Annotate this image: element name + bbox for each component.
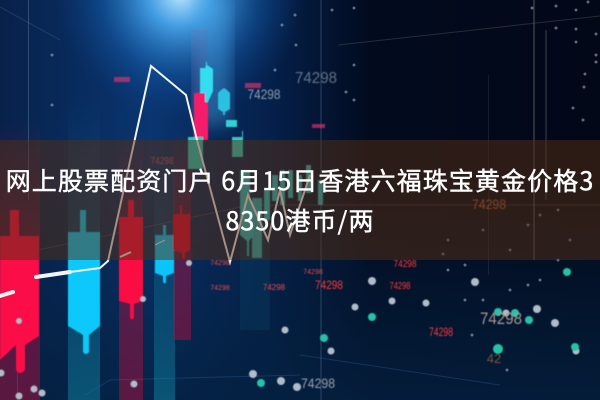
title band xyxy=(0,140,600,260)
candlestick: teal under band xyxy=(188,137,203,169)
candlestick: pink xyxy=(194,93,208,140)
candlestick: red 2 xyxy=(119,200,143,320)
number labels: 74298 xyxy=(248,86,281,102)
white price line xyxy=(0,66,310,296)
candlestick: cyan xyxy=(68,210,100,354)
number labels: 74298 xyxy=(394,259,417,270)
number labels: 74298 xyxy=(150,156,174,167)
candlestick: cyan top xyxy=(200,62,213,102)
title xyxy=(6,162,594,238)
number labels: 74298 xyxy=(429,325,453,339)
number labels: 74298 xyxy=(301,375,335,391)
number labels: 74298 xyxy=(295,70,337,87)
number labels: 74298 xyxy=(263,283,286,292)
candlestick: cyan lozenge xyxy=(218,88,230,115)
number labels: 74298 xyxy=(390,281,411,292)
number labels: 42 xyxy=(487,351,501,366)
number labels: 74298 xyxy=(210,260,230,267)
candlestick: cyan small xyxy=(155,225,174,284)
title: 网上股票配资门户 6月15日香港六福珠宝黄金价格3 xyxy=(6,162,594,198)
number labels: 74298 xyxy=(315,278,343,292)
candlestick: teal right xyxy=(232,131,243,157)
number labels: 74298 xyxy=(303,269,323,276)
title: 8350港币/两 xyxy=(225,202,375,238)
number labels: 74298 xyxy=(210,285,230,292)
candlestick: large red left xyxy=(0,210,39,373)
number labels xyxy=(150,70,522,391)
candlestick cluster: teal xyxy=(240,165,323,258)
candlestick: red top xyxy=(173,205,190,259)
candlesticks xyxy=(0,62,323,373)
glowing dots xyxy=(0,260,580,400)
number labels: 74298 xyxy=(480,309,522,328)
number labels: 74298 xyxy=(472,196,506,212)
candlestick: mini cyan xyxy=(226,120,237,127)
pink tags xyxy=(114,77,325,128)
